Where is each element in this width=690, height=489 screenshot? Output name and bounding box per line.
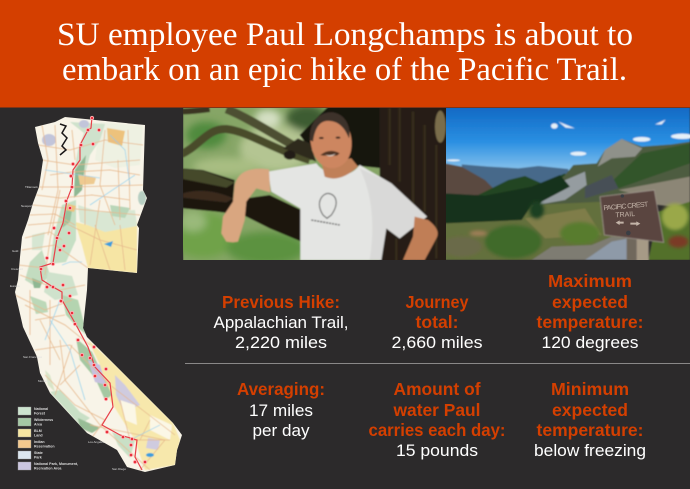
- stat: previous hike: [214, 292, 348, 352]
- coast city labels: Gold: [12, 249, 19, 253]
- photo: Pacific Crest Trail landscape with sign: [442, 105, 690, 262]
- stat: minimum temperature: below freezing: [534, 441, 646, 460]
- stat: minimum temperature: [534, 379, 646, 460]
- neck: [321, 158, 358, 179]
- map legend: National Park, Monument,: [34, 462, 78, 466]
- photo: Pacific Crest Trail landscape with sign: TRAIL: [615, 211, 635, 219]
- stat: maximum temperature: 120 degrees: [542, 333, 638, 352]
- map legend: Area: [34, 422, 43, 426]
- map legend: BLM: [34, 429, 42, 433]
- map legend: Forest: [34, 412, 46, 416]
- rocks: [532, 237, 630, 260]
- distant ridge: [462, 164, 568, 192]
- arms: [221, 169, 270, 242]
- stat: water carried: Amount of: [394, 379, 481, 399]
- stat: water carried: 15 pounds: [396, 441, 478, 460]
- stat: journey total: Journey: [406, 292, 469, 312]
- coast city labels: [10, 185, 126, 471]
- stat: previous hike: 2,220 miles: [235, 333, 327, 352]
- map: Pacific Crest Trail through Washington, Oregon and California: [10, 116, 182, 472]
- title banner: embark on an epic hike of the Pacific Trail.: [62, 52, 627, 88]
- stat: averaging: Averaging:: [237, 379, 325, 399]
- map legend: Reservation: [34, 444, 55, 448]
- map legend: Land: [34, 434, 43, 438]
- shirt: [268, 163, 427, 260]
- map legend: [18, 407, 78, 470]
- title banner: SU employee Paul Longchamps is about to: [57, 17, 633, 53]
- forest: [445, 175, 570, 228]
- sign post: [626, 238, 638, 260]
- coast city labels: Tillamook: [25, 185, 38, 189]
- stat: maximum temperature: expected: [552, 292, 628, 312]
- map legend: Wilderness: [34, 418, 53, 422]
- coast city labels: Eureka: [10, 284, 20, 288]
- meadow: [445, 202, 625, 260]
- stat: maximum temperature: [536, 271, 644, 352]
- bushes: [648, 202, 690, 260]
- map legend: National: [34, 407, 48, 411]
- head: [310, 119, 352, 168]
- stat: water carried: carries each day:: [368, 420, 506, 440]
- Puget Sound coastline: [60, 124, 67, 155]
- sign text: PACIFIC CREST: [603, 201, 649, 212]
- coast city labels: Monterey: [38, 379, 51, 383]
- stat: averaging: [237, 379, 325, 440]
- stat: minimum temperature: temperature:: [536, 420, 644, 440]
- trail markers: [39, 116, 147, 464]
- stat: averaging: 17 miles: [249, 401, 313, 420]
- stat: water carried: water Paul: [393, 400, 480, 420]
- stat: journey total: [392, 292, 482, 352]
- stat: maximum temperature: temperature:: [536, 312, 644, 332]
- coast city labels: San Diego: [112, 467, 126, 471]
- tree trunk: [300, 105, 448, 265]
- stat: minimum temperature: expected: [552, 400, 628, 420]
- stat: previous hike: Appalachian Trail,: [214, 313, 348, 332]
- coast city labels: Newport: [21, 204, 32, 208]
- trail line: [40, 117, 142, 470]
- map legend: Park: [34, 456, 42, 460]
- map legend: State: [34, 451, 43, 455]
- coast city labels: San Francisco: [23, 355, 43, 359]
- stat: water carried: [368, 379, 506, 460]
- stat: averaging: per day: [252, 421, 310, 440]
- stat: maximum temperature: Maximum: [548, 271, 632, 291]
- coast city labels: Crescent: [11, 267, 23, 271]
- stat: journey total: 2,660 miles: [392, 333, 482, 352]
- branches: [181, 168, 301, 242]
- photo: Paul leaning on a tree: [183, 108, 446, 260]
- stat: previous hike: Previous Hike:: [222, 292, 340, 312]
- stat divider: [185, 363, 690, 364]
- stat: minimum temperature: Minimum: [551, 379, 629, 399]
- shirt logo: [311, 193, 340, 225]
- stat: journey total: total:: [416, 312, 458, 332]
- title banner: [0, 0, 690, 108]
- main mountain and slope: [532, 139, 690, 205]
- map legend: Indian: [34, 440, 45, 444]
- map legend: Recreation Area: [34, 466, 62, 470]
- coast city labels: Los Angeles: [88, 440, 105, 444]
